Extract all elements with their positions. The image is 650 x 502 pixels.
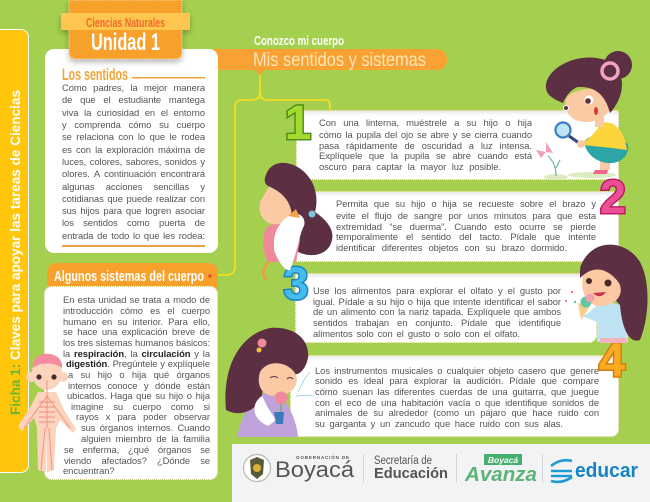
- logo: Secretaría de Educación: [374, 455, 448, 482]
- card 3: [295, 273, 597, 343]
- text: los sentidos body: luces, colores, sabores, sonidos y: [62, 156, 205, 167]
- number 4: 4: [599, 333, 625, 386]
- text: card 3: [313, 285, 561, 339]
- card 4: [290, 355, 619, 437]
- text: sistemas body: a su hijo o hija qué órganos: [68, 369, 210, 380]
- text: card 4: Los instrumentos musicales o cualquier objeto casero que genere: [315, 365, 599, 376]
- text: card 1: [319, 117, 532, 172]
- panel: sistemas del cuerpo header: [47, 263, 218, 290]
- card 1: [296, 110, 619, 180]
- text: card 3: Use los alimentos para explorar el olfato y el gusto por: [313, 285, 561, 296]
- text: los sentidos body: [62, 82, 205, 241]
- tab: unidad: Ciencias Naturales: [86, 15, 165, 30]
- text: sistemas body: internos conoce y dónde están: [68, 380, 210, 391]
- logo: Boyacá Avanza: Boyacá: [488, 455, 518, 465]
- text: card 2: identificar diferentes objetos con su brazo dormido.: [336, 242, 567, 253]
- header: conozco mi cuerpo: [210, 33, 447, 75]
- logo: Boyacá Avanza: [464, 454, 537, 486]
- text: sistemas body: humano en su interior. Para ello,: [63, 316, 210, 327]
- panel: sistemas del cuerpo: [44, 286, 218, 480]
- text: sistemas body: viendo afectados? ¿Dónde se: [64, 455, 210, 466]
- header: conozco mi cuerpo: Mis sentidos y sistemas: [253, 50, 426, 71]
- text: sistemas body: se hace una explicación breve de: [63, 326, 210, 337]
- text: card 2: Permita que su hijo o hija se recueste sobre el brazo y: [336, 198, 596, 209]
- panel: los sentidos: [45, 49, 218, 253]
- panel: sidebar: [0, 29, 29, 473]
- text: sistemas body: En esta unidad se trata a modo de: [63, 294, 210, 305]
- text: card 1: Explíquele que la pupila se abre cuando está: [319, 150, 532, 161]
- text: los sentidos body: algunas acciones sencillas y: [62, 181, 205, 192]
- text: los sentidos body: de que el estudiante mantega: [62, 94, 205, 105]
- text: sistemas body: alguien miembro de la familia: [81, 433, 210, 444]
- text: los sentidos body: Como padres, la mejor manera: [62, 82, 205, 93]
- logo: Secretaría de Educación: Educación: [374, 465, 448, 482]
- logo: Secretaría de Educación: Secretaría de: [374, 455, 432, 467]
- text: card 1: pasa rápidamente de oscuridad a luz intensa.: [319, 140, 532, 151]
- text: sistemas body: ubicados. Haga que su hijo o hija: [67, 390, 210, 401]
- text: los sentidos body: sus hijos para que logren asociar: [62, 205, 205, 216]
- number 3: 3: [283, 258, 309, 309]
- panel: sistemas del cuerpo header: Algunos sistemas del cuerpo: [54, 268, 204, 285]
- logo: Boyacá: GOBERNACIÓN DE: [296, 453, 349, 460]
- text: card 4: [315, 365, 599, 429]
- logo: educar: educar: [575, 460, 638, 482]
- text: card 4: su garganta y un zancudo que hace ruido con sus alas.: [315, 418, 563, 429]
- text: card 4: con el eco de una habitación vacía o que identifique sonidos de: [315, 397, 599, 408]
- text: sistemas body: introducción cómo es el cuerpo: [63, 305, 210, 316]
- text: card 3: sentidos trabajan en conjunto. Pídale que identifique: [313, 317, 561, 328]
- text: sistemas body: los tres sistemas humanos básicos:: [63, 337, 210, 348]
- text: card 4: sonido es ideal para explorar la audición. Pídale que compare: [315, 375, 599, 386]
- text: los sentidos body: olores. A continuación encontrará: [62, 168, 205, 179]
- text: sistemas body: sus órganos internos. Cuando: [81, 422, 210, 433]
- card 2: [296, 191, 619, 262]
- text: los sentidos body: se relaciona con lo que le rodea: [62, 131, 205, 142]
- text: card 2: extremidad “se duerma”. Cuando esto ocurre se pierde: [336, 221, 596, 232]
- text: los sentidos body: es con la exploración máxima de: [62, 144, 205, 154]
- number 2: 2: [600, 170, 626, 223]
- header: conozco mi cuerpo: Conozco mi cuerpo: [254, 33, 344, 48]
- text: card 2: [336, 198, 596, 253]
- text: card 2: temporalmente el sentido del tacto. Pídale que intente: [336, 231, 596, 242]
- text: sistemas body: encuentran?: [63, 465, 115, 476]
- text: card 3: igual. Pídale a su hijo o hija que intente identificar el sabor: [313, 296, 561, 307]
- text: card 1: oscuro para captar la mayor luz posible.: [319, 161, 501, 172]
- text: sistemas body: digestión. Pregúntele y explíquele: [66, 358, 210, 369]
- text: los sentidos body: los sentidos como puerta de: [62, 217, 205, 228]
- tab: unidad: [58, 0, 193, 66]
- logo: Boyacá Avanza: Avanza: [464, 464, 537, 486]
- heading: los sentidos: Los sentidos: [62, 65, 128, 84]
- text: sistemas body: [63, 294, 210, 476]
- text: card 1: cómo la pupila del ojo se abre y se cierra cuando: [319, 128, 532, 140]
- text: card 3: alimentos solo con el gusto o solo con el olfato.: [313, 328, 520, 339]
- icon: coat of arms: [244, 454, 270, 482]
- panel: footer logos: [232, 444, 650, 502]
- text: los sentidos body: y comprenda cómo su cuerpo: [62, 119, 205, 130]
- text: sistemas body: la respiración, la circulación y la: [63, 348, 210, 359]
- text: card 3: de un alimento con la nariz tapada. Explíquele que ambos: [313, 306, 561, 317]
- number 1: 1: [285, 97, 311, 150]
- logo: Boyacá: Boyacá: [275, 457, 355, 482]
- text: los sentidos body: entrada de todo lo que les rodea:: [62, 230, 205, 241]
- text: card 4: cómo suenan las diferentes cuerdas de una guitarra, que juegue: [315, 386, 599, 397]
- text: card 2: evite el flujo de sangre por unos minutos para que esta: [336, 210, 596, 221]
- text: card 1: Con una linterna, muéstrele a su hijo o hija: [319, 117, 532, 128]
- text: card 4: animales de su alrededor (como un pájaro que hace ruido con: [315, 407, 599, 418]
- tab: unidad: Unidad 1: [91, 29, 160, 56]
- text: los sentidos body: cotidianas que puede realizar con: [62, 193, 205, 204]
- text: sistemas body: rayos x para poder observar: [76, 411, 210, 422]
- sidebar title: Ficha 1: Claves para apoyar las tareas de Ciencias: [8, 90, 23, 415]
- text: los sentidos body: viva la curiosidad en el entorno: [62, 106, 205, 118]
